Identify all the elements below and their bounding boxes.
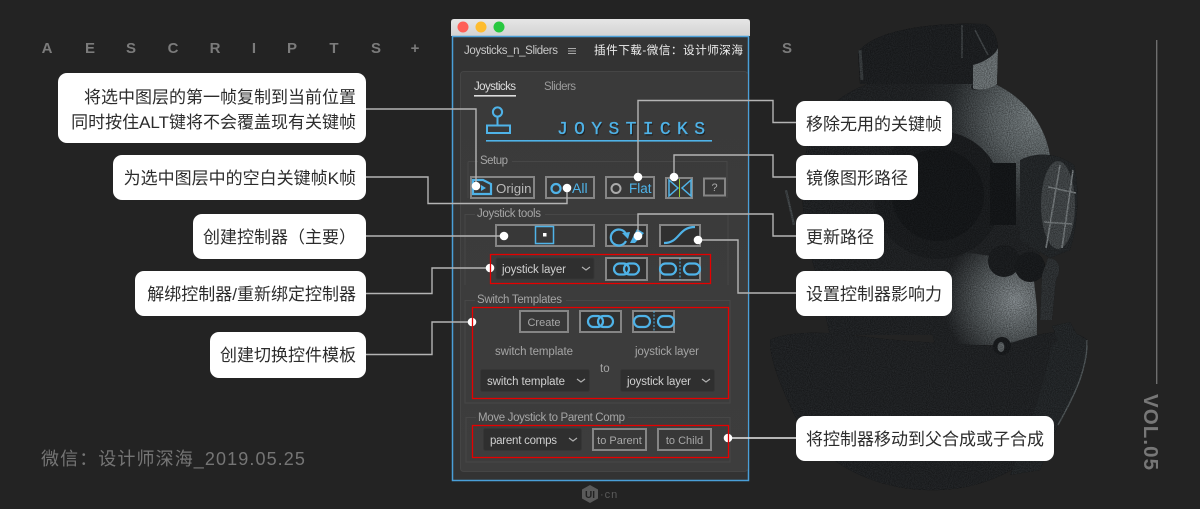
- callout: switch template: [210, 332, 366, 378]
- button: mirror: [666, 178, 692, 198]
- callout: create controller: [193, 214, 366, 259]
- button: to parent: [593, 429, 646, 450]
- section: switch templates: Switch Templates: [477, 294, 562, 306]
- callout: copy first frame: 将选中图层的第一帧复制到当前位置: [84, 88, 356, 107]
- panel header: 插件下载-微信：设计师深海: [594, 43, 743, 57]
- section: setup: [468, 155, 727, 198]
- tabs: Sliders: [544, 81, 576, 93]
- callout: move to parent or child: 将控制器移动到父合成或子合成: [806, 430, 1044, 449]
- logo: UI cn: [582, 485, 618, 503]
- section: joystick tools: [465, 208, 728, 285]
- button: create: Create: [527, 317, 561, 329]
- button: help: ?: [711, 182, 718, 194]
- red highlight boxes: [472, 254, 728, 458]
- labels: switch template to joystick layer: [495, 346, 699, 375]
- dropdown: joystick layer: [620, 370, 714, 392]
- callout: blank keyframes: [113, 155, 366, 200]
- section: switch templates: [465, 294, 730, 403]
- callout: remove keyframes: 移除无用的关键帧: [806, 115, 942, 134]
- anchor dots: [468, 173, 732, 442]
- labels: switch template to joystick layer: to: [600, 363, 610, 375]
- callout: remove keyframes: [796, 101, 952, 146]
- callout: update path: 更新路径: [806, 228, 874, 247]
- button: all: [546, 177, 594, 198]
- panel header: Joysticks_n_Sliders: [464, 45, 558, 57]
- panel header: [464, 43, 743, 57]
- section: joystick tools: Joystick tools: [477, 208, 541, 220]
- logo: UI cn: ·cn: [600, 489, 618, 501]
- callout: influence: 设置控制器影响力: [806, 285, 942, 304]
- callout: update path: [796, 214, 884, 259]
- dropdown: parent comps: parent comps: [490, 435, 557, 447]
- button: all: All: [572, 180, 588, 196]
- panel frame: [452, 36, 748, 480]
- callout: copy first frame: [58, 73, 366, 143]
- logo: UI cn: UI: [585, 490, 595, 501]
- section: move joystick to parent comp: Move Joystick to Parent Comp: [478, 412, 625, 424]
- dropdown: joystick layer: joystick layer: [501, 264, 566, 276]
- button: bind: [606, 258, 647, 280]
- labels: switch template to joystick layer: switch template: [495, 346, 573, 358]
- section: move joystick to parent comp: [466, 412, 730, 462]
- button: flat: Flat: [629, 181, 652, 196]
- callout: mirror path: [796, 155, 918, 200]
- callout: mirror path: 镜像图形路径: [806, 169, 908, 188]
- button: to parent: to Parent: [597, 435, 642, 447]
- button: unbind: [660, 258, 700, 280]
- callout: create controller: 创建控制器（主要）: [203, 228, 356, 247]
- plugin window: [451, 19, 750, 480]
- callout: unbind rebind: [135, 271, 366, 316]
- icon: joystick: [487, 107, 510, 133]
- date text: 微信：设计师深海_2019.05.25: [41, 449, 306, 470]
- section: setup: Setup: [480, 155, 508, 167]
- joysticks title: JOYSTICKS: [557, 120, 705, 140]
- button: flat: [606, 177, 654, 198]
- tabs: [474, 81, 576, 97]
- button: to child: to Child: [666, 435, 703, 447]
- callout: move to parent or child: [796, 416, 1054, 461]
- callout: switch template: 创建切换控件模板: [220, 346, 356, 365]
- callout: unbind rebind: 解绑控制器/重新绑定控制器: [147, 285, 356, 304]
- dropdown: parent comps: [484, 428, 582, 450]
- button: help: [704, 178, 725, 196]
- button: to child: [658, 429, 711, 450]
- button: create controller: [496, 225, 594, 246]
- callout: blank keyframes: 为选中图层中的空白关键帧K帧: [124, 169, 356, 188]
- volume label: VOL.05: [1139, 394, 1162, 470]
- button: influence curve: [660, 225, 700, 246]
- button: bind template: [580, 311, 621, 332]
- helmet illustration: [770, 24, 1087, 490]
- button: unbind template: [633, 311, 674, 332]
- callout: copy first frame: 同时按住ALT键将不会覆盖现有关键帧: [71, 113, 356, 132]
- dropdown: joystick layer: joystick layer: [626, 376, 691, 388]
- dropdown: switch template: switch template: [487, 376, 565, 388]
- callout: influence: [796, 271, 952, 316]
- joysticks title: [486, 120, 712, 142]
- dropdown: joystick layer: [496, 258, 594, 279]
- title bar: [451, 19, 750, 36]
- vertical rule: [1156, 40, 1157, 384]
- dropdown: switch template: [480, 370, 590, 392]
- labels: switch template to joystick layer: joystick layer: [634, 346, 699, 358]
- button: create: [520, 311, 568, 332]
- tabs: Joysticks: [474, 81, 516, 93]
- button: origin: Origin: [496, 181, 531, 196]
- connector lines: [366, 100, 796, 438]
- panel body: [460, 72, 748, 472]
- button: refresh path: [606, 225, 647, 246]
- joysticks title: JOYSTICKS: [558, 122, 706, 142]
- header text: AESCRIPTS +: AESCRIPTS+S: [42, 40, 792, 57]
- button: origin: [471, 177, 534, 198]
